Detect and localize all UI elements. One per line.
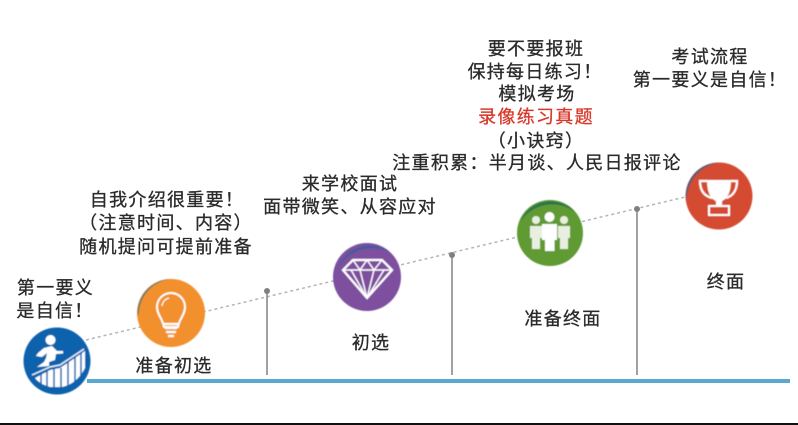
bottom edge bar [0, 423, 798, 425]
milestone marker 1 [264, 288, 270, 375]
text: final preparation tips [392, 39, 682, 173]
text: final preparation tips: 保持每日练习！ [467, 62, 603, 82]
text: final preparation tips: （小诀窍） [488, 131, 584, 151]
text: exam process note: 考试流程 [671, 47, 749, 67]
text: self introduction tips: 自我介绍很重要！ [90, 190, 244, 210]
text: exam process note [633, 47, 787, 90]
text: school interview tips [263, 174, 437, 217]
text: self introduction tips: （注意时间、内容） [79, 213, 253, 233]
text: school interview tips: 面带微笑、从容应对 [263, 197, 437, 217]
text: exam process note: 第一要义是自信！ [633, 70, 787, 90]
timeline baseline [87, 379, 790, 383]
text: school interview tips: 来学校面试 [302, 174, 398, 194]
text: self introduction tips: 随机提问可提前准备 [79, 237, 253, 257]
icon: light bulb [137, 279, 205, 347]
icon: diamond [333, 243, 401, 311]
label: prepare final: 准备终面 [524, 309, 602, 329]
milestone marker 3 [634, 206, 640, 375]
icon: runner climbing stairs [24, 328, 90, 394]
text: confidence note: 第一要义 [17, 278, 94, 298]
rising dotted trend line [86, 197, 685, 340]
text: self introduction tips [79, 190, 253, 257]
label: final: 终面 [707, 272, 745, 292]
text: final preparation tips: 录像练习真题 [478, 107, 594, 127]
text: confidence note [16, 278, 94, 321]
label: preliminary: 初选 [352, 333, 390, 353]
text: final preparation tips: 注重积累：半月谈、人民日报评论 [392, 153, 682, 173]
text: confidence note: 是自信！ [16, 301, 94, 321]
icon: trophy [686, 162, 752, 230]
text: final preparation tips: 要不要报班 [488, 39, 584, 59]
label: prepare preliminary: 准备初选 [135, 356, 213, 376]
icon: group of people [517, 200, 583, 266]
milestone marker 2 [449, 252, 455, 375]
text: final preparation tips: 模拟考场 [498, 84, 576, 104]
